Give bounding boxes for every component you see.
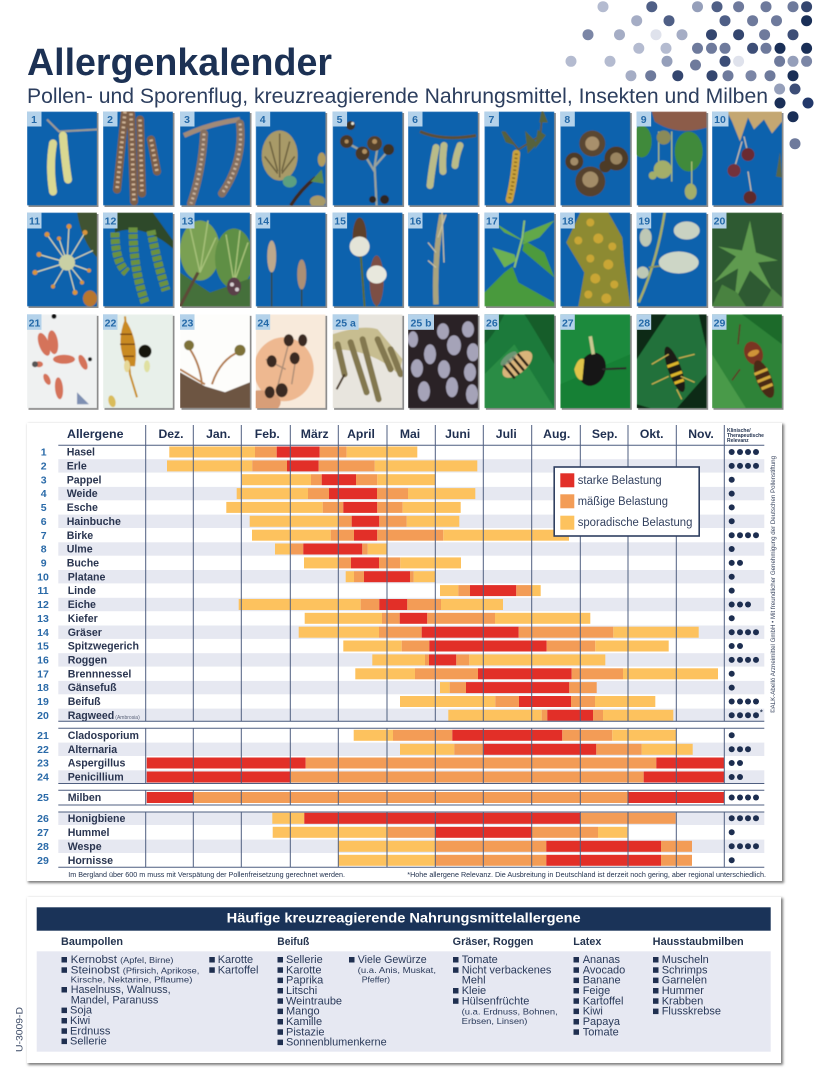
photo 6: Hainbuche: 6: [412, 114, 418, 126]
legend: starke Belastung: [578, 475, 662, 487]
photo 12: Eiche: [103, 212, 174, 308]
photo 25 b: Milben: 25 b: [410, 317, 432, 329]
row 26 Honigbiene: [37, 812, 764, 825]
column: Beifuss: Mango: [286, 1006, 320, 1018]
column: Beifuss: Pfeffer): [362, 974, 390, 984]
photo row 3: [27, 314, 784, 414]
column: Beifuss: Sonnenblumenkerne: [286, 1037, 387, 1049]
photo 8: Ulme: 8: [564, 114, 570, 126]
photo 7: Birke: [484, 112, 556, 207]
row 22 Alternaria: [37, 743, 764, 756]
calendar header: Aug.: [543, 427, 570, 441]
column: Beifuss: Litschi: [286, 985, 317, 997]
calendar header: Okt.: [640, 427, 664, 441]
panel: allergen calendar: [27, 423, 784, 883]
row 1 Hasel: Hasel: [67, 447, 95, 459]
row 25 Milben: [37, 792, 759, 804]
row 21 Cladosporium: [37, 730, 735, 742]
column: Graeser, Roggen: Hülsenfrüchte: [462, 995, 529, 1007]
column: Baumpollen: Steinobst (Pfirsich, Aprikose,: [71, 964, 199, 976]
row 5 Esche: Esche: [67, 502, 98, 514]
photo 1: Hasel: [27, 112, 98, 207]
column: Graeser, Roggen: Gräser, Roggen: [453, 936, 533, 948]
column: Baumpollen: Kirsche, Nektarine, Pflaume): [71, 974, 193, 984]
photo 5: Esche: [333, 112, 404, 207]
calendar header: Relevanz: [727, 438, 749, 444]
row 19 Beifuss: [37, 696, 759, 708]
column: Baumpollen: Soja: [70, 1005, 93, 1017]
row 10 Platane: Platane: [68, 571, 105, 583]
column: Graeser, Roggen: (u.a. Erdnuss, Bohnen,: [462, 1007, 558, 1017]
row 6 Hainbuche: 6: [41, 516, 47, 528]
row 4 Weide: Weide: [67, 488, 98, 500]
calendar header: Therapeutische: [727, 433, 764, 439]
photo 5: Esche: 5: [337, 114, 343, 126]
legend: sporadische Belastung: [578, 517, 692, 529]
row 24 Penicillium: [37, 770, 764, 784]
row 28 Wespe: [37, 840, 764, 853]
photo 28: Wespe: 28: [638, 317, 650, 329]
photo 27: Hummel: [560, 314, 632, 410]
row 21 Cladosporium: Cladosporium: [68, 730, 139, 742]
photo 20: Ragweed: 20: [714, 216, 725, 228]
column: Latex: Kartoffel: [583, 995, 623, 1007]
row 9 Buche: [41, 557, 743, 570]
row 4 Weide: 4: [41, 488, 47, 500]
row 25 Milben: 25: [37, 792, 49, 804]
calendar header: Feb.: [255, 427, 280, 441]
column: Latex: Banane: [583, 975, 621, 987]
row 23 Aspergillus: [37, 758, 743, 770]
row 8 Ulme: [41, 542, 764, 556]
row 4 Weide: [41, 487, 764, 500]
column: Graeser, Roggen: Kleie: [462, 985, 486, 997]
photo 25 b: Milben: [408, 314, 480, 410]
column: Graeser, Roggen: [453, 936, 558, 1026]
row 27 Hummel: 27: [37, 827, 49, 839]
photo 3: Pappel: 3: [184, 114, 190, 126]
row 14 Graeser: Gräser: [68, 627, 102, 639]
row 8 Ulme: Ulme: [67, 544, 93, 556]
photo 14: Wegerich spike: [256, 212, 327, 308]
row 12 Eiche: Eiche: [68, 599, 96, 611]
row 23 Aspergillus: Aspergillus: [68, 758, 125, 770]
row 13 Kiefer: 13: [37, 613, 49, 625]
row 11 Linde: Linde: [68, 585, 96, 597]
column: Beifuss: Viele Gewürze: [358, 954, 427, 966]
decorative dot cluster: [566, 1, 814, 149]
row 20 Ragweed: *: [760, 709, 763, 716]
row 7 Birke: 7: [41, 530, 47, 542]
photo 13: Kiefer: [180, 212, 253, 308]
column: Latex: Kiwi: [583, 1006, 603, 1018]
calendar header: Dez.: [158, 427, 184, 441]
photo 11: Linde: [27, 212, 98, 308]
column: Latex: Tomate: [583, 1026, 619, 1038]
photo 12: Eiche: 12: [105, 216, 116, 228]
row 22 Alternaria: 22: [37, 744, 49, 756]
photo row 2: [27, 212, 784, 308]
photo 21: Cladosporium: 21: [29, 317, 40, 329]
row 29 Hornisse: 29: [37, 855, 49, 867]
photo 18: Gaensefuss: 18: [562, 216, 574, 228]
column: Graeser, Roggen: Nicht verbackenes: [462, 964, 552, 976]
column: Beifuss: Sellerie: [286, 954, 323, 966]
photo 23: Aspergillus: [180, 314, 252, 410]
footnote: mountain regions: Im Bergland über 600 m muss mit Verspätung der Pollenfreisetzung gerechnet werden.: [68, 870, 345, 879]
row 10 Platane: 10: [37, 571, 49, 583]
row 17 Brennnessel: [37, 668, 735, 680]
photo 18: Gaensefuss: [560, 212, 632, 308]
photo 24: Penicillium: [256, 314, 328, 410]
photo 15: Spitzwegerich: [333, 212, 404, 308]
photo 29: Hornisse: [712, 314, 784, 410]
column: Latex: [573, 936, 625, 1038]
row 5 Esche: 5: [41, 502, 47, 514]
column: Latex: Papaya: [583, 1016, 621, 1028]
column: Latex: Avocado: [583, 964, 625, 976]
row 11 Linde: 11: [37, 585, 49, 597]
column: Latex: Latex: [573, 936, 601, 948]
row 2 Erle: Erle: [67, 460, 87, 472]
photo 9: Buche: 9: [641, 114, 647, 126]
row 10 Platane: [37, 570, 764, 583]
legend: [554, 467, 699, 536]
row 22 Alternaria: Alternaria: [68, 744, 117, 756]
column: Baumpollen: Haselnuss, Walnuss,: [71, 984, 171, 996]
photo 7: Birke: 7: [488, 114, 494, 126]
column: Beifuss: Kamille: [286, 1016, 322, 1028]
calendar header: Mai: [400, 427, 420, 441]
photo 8: Ulme: [560, 112, 632, 207]
row 29 Hornisse: Hornisse: [68, 855, 113, 867]
row 25 Milben: Milben: [68, 792, 101, 804]
panel: cross-reactive food allergens: [27, 897, 783, 1065]
photo 6: Hainbuche: [408, 112, 480, 207]
photo 22: Alternaria: 22: [105, 317, 116, 329]
calendar header: Jan.: [206, 427, 230, 441]
row 3 Pappel: 3: [41, 474, 47, 486]
row 16 Roggen: Roggen: [68, 655, 107, 667]
photo 29: Hornisse: 29: [714, 317, 725, 329]
row 20 Ragweed: 20: [37, 710, 49, 722]
row 26 Honigbiene: 26: [37, 813, 49, 825]
photo 2: Erle: [103, 112, 174, 207]
photo 26: Honigbiene: [484, 314, 556, 410]
photo 3: Pappel: [180, 112, 252, 207]
column: Hausstaubmilben: Flusskrebse: [662, 1006, 721, 1018]
row 15 Spitzwegerich: 15: [37, 641, 49, 653]
calendar header: März: [301, 427, 329, 441]
row 28 Wespe: Wespe: [68, 841, 102, 853]
row 19 Beifuss: Beifuß: [68, 696, 101, 708]
row 14 Graeser: 14: [37, 627, 49, 639]
row 19 Beifuss: 19: [37, 696, 49, 708]
column: Baumpollen: [61, 936, 258, 1048]
title: Allergenkalender: [27, 42, 332, 84]
photo 26: Honigbiene: 26: [486, 317, 498, 329]
row 27 Hummel: [37, 827, 735, 839]
row 29 Hornisse: [37, 855, 735, 867]
row 27 Hummel: Hummel: [68, 827, 110, 839]
panel header: Häufige kreuzreagierende Nahrungsmittelallergene: [227, 910, 581, 926]
column: Baumpollen: Mandel, Paranuss: [71, 994, 159, 1006]
column: Hausstaubmilben: Muscheln: [662, 954, 709, 966]
photo 2: Erle: 2: [107, 114, 113, 126]
column: Baumpollen: Kiwi: [70, 1015, 90, 1027]
photo 25 a: Milbe Detail: 25 a: [335, 317, 356, 329]
photo 11: Linde: 11: [29, 216, 40, 228]
column: Beifuss: Pistazie: [286, 1026, 325, 1038]
row 18 Gaensefuss: 18: [37, 682, 49, 694]
column: Hausstaubmilben: Krabben: [662, 995, 703, 1007]
row 20 Ragweed: Ragweed: [68, 710, 114, 722]
row 20 Ragweed: [37, 709, 764, 722]
row 1 Hasel: 1: [41, 447, 47, 459]
row 12 Eiche: [37, 598, 764, 611]
row 5 Esche: [41, 502, 735, 514]
photo 19: Beifuss: 19: [638, 216, 650, 228]
column: Beifuss: (u.a. Anis, Muskat,: [358, 965, 436, 975]
column: Graeser, Roggen: Erbsen, Linsen): [462, 1016, 528, 1026]
column: Latex: Ananas: [583, 954, 621, 966]
row 13 Kiefer: [37, 613, 735, 625]
document code: U-3009-D: [14, 1007, 26, 1052]
column: Hausstaubmilben: Hummer: [662, 985, 704, 997]
photo 13: Kiefer: 13: [182, 216, 193, 228]
photo 19: Beifuss: [637, 212, 708, 308]
photo 22: Alternaria: [103, 314, 174, 410]
row 11 Linde: [37, 585, 735, 597]
calendar header: Klinische/: [727, 428, 751, 434]
copyright note: ©ALK-Abelló Arzneimittel GmbH • Mit freundlicher Genehmigung der Deutschen Pollenstiftung: [769, 456, 777, 713]
row 12 Eiche: 12: [37, 599, 49, 611]
column: Hausstaubmilben: [653, 936, 744, 1018]
photo 17: Brennnessel: 17: [486, 216, 498, 228]
column: Baumpollen: Erdnuss: [70, 1025, 111, 1037]
photo 14: Wegerich spike: 14: [257, 216, 269, 228]
row 16 Roggen: 16: [37, 655, 49, 667]
row 23 Aspergillus: 23: [37, 758, 49, 770]
photo 15: Spitzwegerich: 15: [334, 216, 346, 228]
photo 16: Roggen: [408, 212, 480, 308]
column: Graeser, Roggen: Tomate: [462, 954, 498, 966]
row 2 Erle: 2: [41, 460, 47, 472]
row 9 Buche: 9: [41, 558, 47, 570]
column: Hausstaubmilben: Hausstaubmilben: [653, 936, 744, 948]
column: Beifuss: Paprika: [286, 975, 324, 987]
row 9 Buche: Buche: [67, 558, 99, 570]
photo 10: Platane: 10: [714, 114, 726, 126]
row 17 Brennnessel: 17: [37, 668, 49, 680]
column: Baumpollen: Baumpollen: [61, 936, 123, 948]
row 3 Pappel: [41, 474, 735, 486]
photo 27: Hummel: 27: [562, 317, 574, 329]
photo 20: Ragweed: [712, 212, 784, 308]
row 21 Cladosporium: 21: [37, 730, 49, 742]
column: Hausstaubmilben: Schrimps: [662, 964, 708, 976]
row 6 Hainbuche: [41, 515, 764, 528]
row 18 Gaensefuss: Gänsefuß: [68, 682, 117, 694]
column: Hausstaubmilben: Garnelen: [662, 975, 707, 987]
calendar header: Juli: [496, 427, 517, 441]
row 1 Hasel: [41, 446, 759, 459]
column: Baumpollen: Kartoffel: [218, 964, 258, 976]
row 17 Brennnessel: Brennnessel: [68, 668, 131, 680]
calendar header: Allergene: [67, 427, 124, 441]
row 20 Ragweed: (Ambrosia): [115, 715, 140, 721]
row 2 Erle: [41, 459, 764, 473]
column: Beifuss: Beifuß: [277, 936, 310, 948]
photo 21: Cladosporium: [27, 314, 98, 410]
column: Latex: Feige: [583, 985, 610, 997]
column: Baumpollen: Karotte: [218, 954, 253, 966]
photo row 1: [27, 112, 784, 208]
footnote: high allergen relevance: *Hohe allergene Relevanz. Die Ausbreitung in Deutschland ist derzeit noch gering, aber regional unterschiedlich.: [407, 870, 766, 879]
photo 10: Platane: [712, 112, 784, 207]
row 15 Spitzwegerich: Spitzwegerich: [68, 641, 139, 653]
photo 28: Wespe: [637, 314, 708, 410]
row 6 Hainbuche: Hainbuche: [67, 516, 121, 528]
photo 16: Roggen: 16: [410, 216, 421, 228]
row 16 Roggen: [37, 653, 764, 667]
row 24 Penicillium: 24: [37, 772, 49, 784]
column: Beifuss: Karotte: [286, 964, 321, 976]
photo 17: Brennnessel: [484, 212, 556, 308]
row 7 Birke: Birke: [67, 530, 93, 542]
row 8 Ulme: 8: [41, 544, 47, 556]
panel header: [37, 907, 771, 931]
row 14 Graeser: [37, 626, 764, 639]
photo 4: Weide: 4: [260, 114, 266, 126]
column: Beifuss: [277, 936, 436, 1049]
photo 24: Penicillium: 24: [257, 317, 269, 329]
column: Baumpollen: Kernobst (Apfel, Birne): [71, 954, 174, 966]
calendar header: [67, 427, 764, 444]
column: Baumpollen: Sellerie: [70, 1036, 107, 1048]
photo 4: Weide: [256, 112, 327, 208]
subtitle: Pollen- und Sporenflug, kreuzreagierende Nahrungsmittel, Insekten und Milben: [27, 85, 768, 108]
calendar header: Juni: [445, 427, 470, 441]
photo 1: Hasel: 1: [31, 114, 37, 126]
column: Beifuss: Weintraube: [286, 995, 342, 1007]
row 28 Wespe: 28: [37, 841, 49, 853]
row 7 Birke: [41, 530, 759, 542]
row 3 Pappel: Pappel: [67, 474, 101, 486]
calendar header: Sep.: [592, 427, 618, 441]
row 15 Spitzwegerich: [37, 640, 743, 653]
calendar header: April: [347, 427, 375, 441]
row 24 Penicillium: Penicillium: [68, 772, 124, 784]
row 18 Gaensefuss: [37, 681, 764, 694]
row 26 Honigbiene: Honigbiene: [68, 813, 125, 825]
legend: mäßige Belastung: [578, 496, 668, 508]
row 13 Kiefer: Kiefer: [68, 613, 98, 625]
photo 9: Buche: [632, 112, 708, 207]
photo 25 a: Milbe Detail: [333, 314, 404, 410]
calendar header: Nov.: [688, 427, 714, 441]
photo 23: Aspergillus: 23: [182, 317, 193, 329]
column: Graeser, Roggen: Mehl: [462, 975, 486, 987]
